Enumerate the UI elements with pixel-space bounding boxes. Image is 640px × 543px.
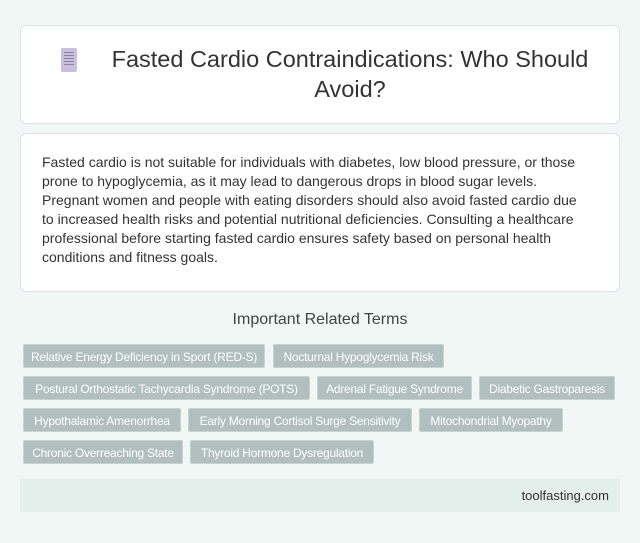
footer source text: toolfasting.com [522, 488, 609, 503]
title: Fasted Cardio Contraindications: Who Should Avoid? [112, 46, 588, 102]
tags: Relative Energy Deficiency in Sport (RED-S) [31, 350, 257, 364]
icon: document [61, 48, 77, 72]
tags: Adrenal Fatigue Syndrome [326, 382, 463, 396]
tags: Postural Orthostatic Tachycardia Syndrome (POTS) [35, 382, 298, 396]
description text: Fasted cardio is not suitable for individuals with diabetes, low blood pressure, or those prone to hypoglycemia, as it may lead to dangerous drops in blood sugar levels. Pregnant women and people with eating disorders should also avoid fasted cardio due to increased health risks and potential nutritional deficiencies. Consulting a healthcare professional before starting fasted cardio ensures safety based on personal health conditions and fitness goals. [42, 154, 577, 265]
tags: Thyroid Hormone Dysregulation [201, 446, 363, 460]
tags: Chronic Overreaching State [32, 446, 174, 460]
header card [20, 25, 620, 124]
tags: Diabetic Gastroparesis [489, 382, 605, 396]
footer [20, 479, 620, 512]
tags: Nocturnal Hypoglycemia Risk [284, 350, 433, 364]
description card [20, 133, 620, 292]
related terms heading: Important Related Terms [233, 311, 407, 328]
tags: Hypothalamic Amenorrhea [34, 414, 170, 428]
tags: Mitochondrial Myopathy [430, 414, 552, 428]
tags: Early Morning Cortisol Surge Sensitivity [200, 414, 400, 428]
